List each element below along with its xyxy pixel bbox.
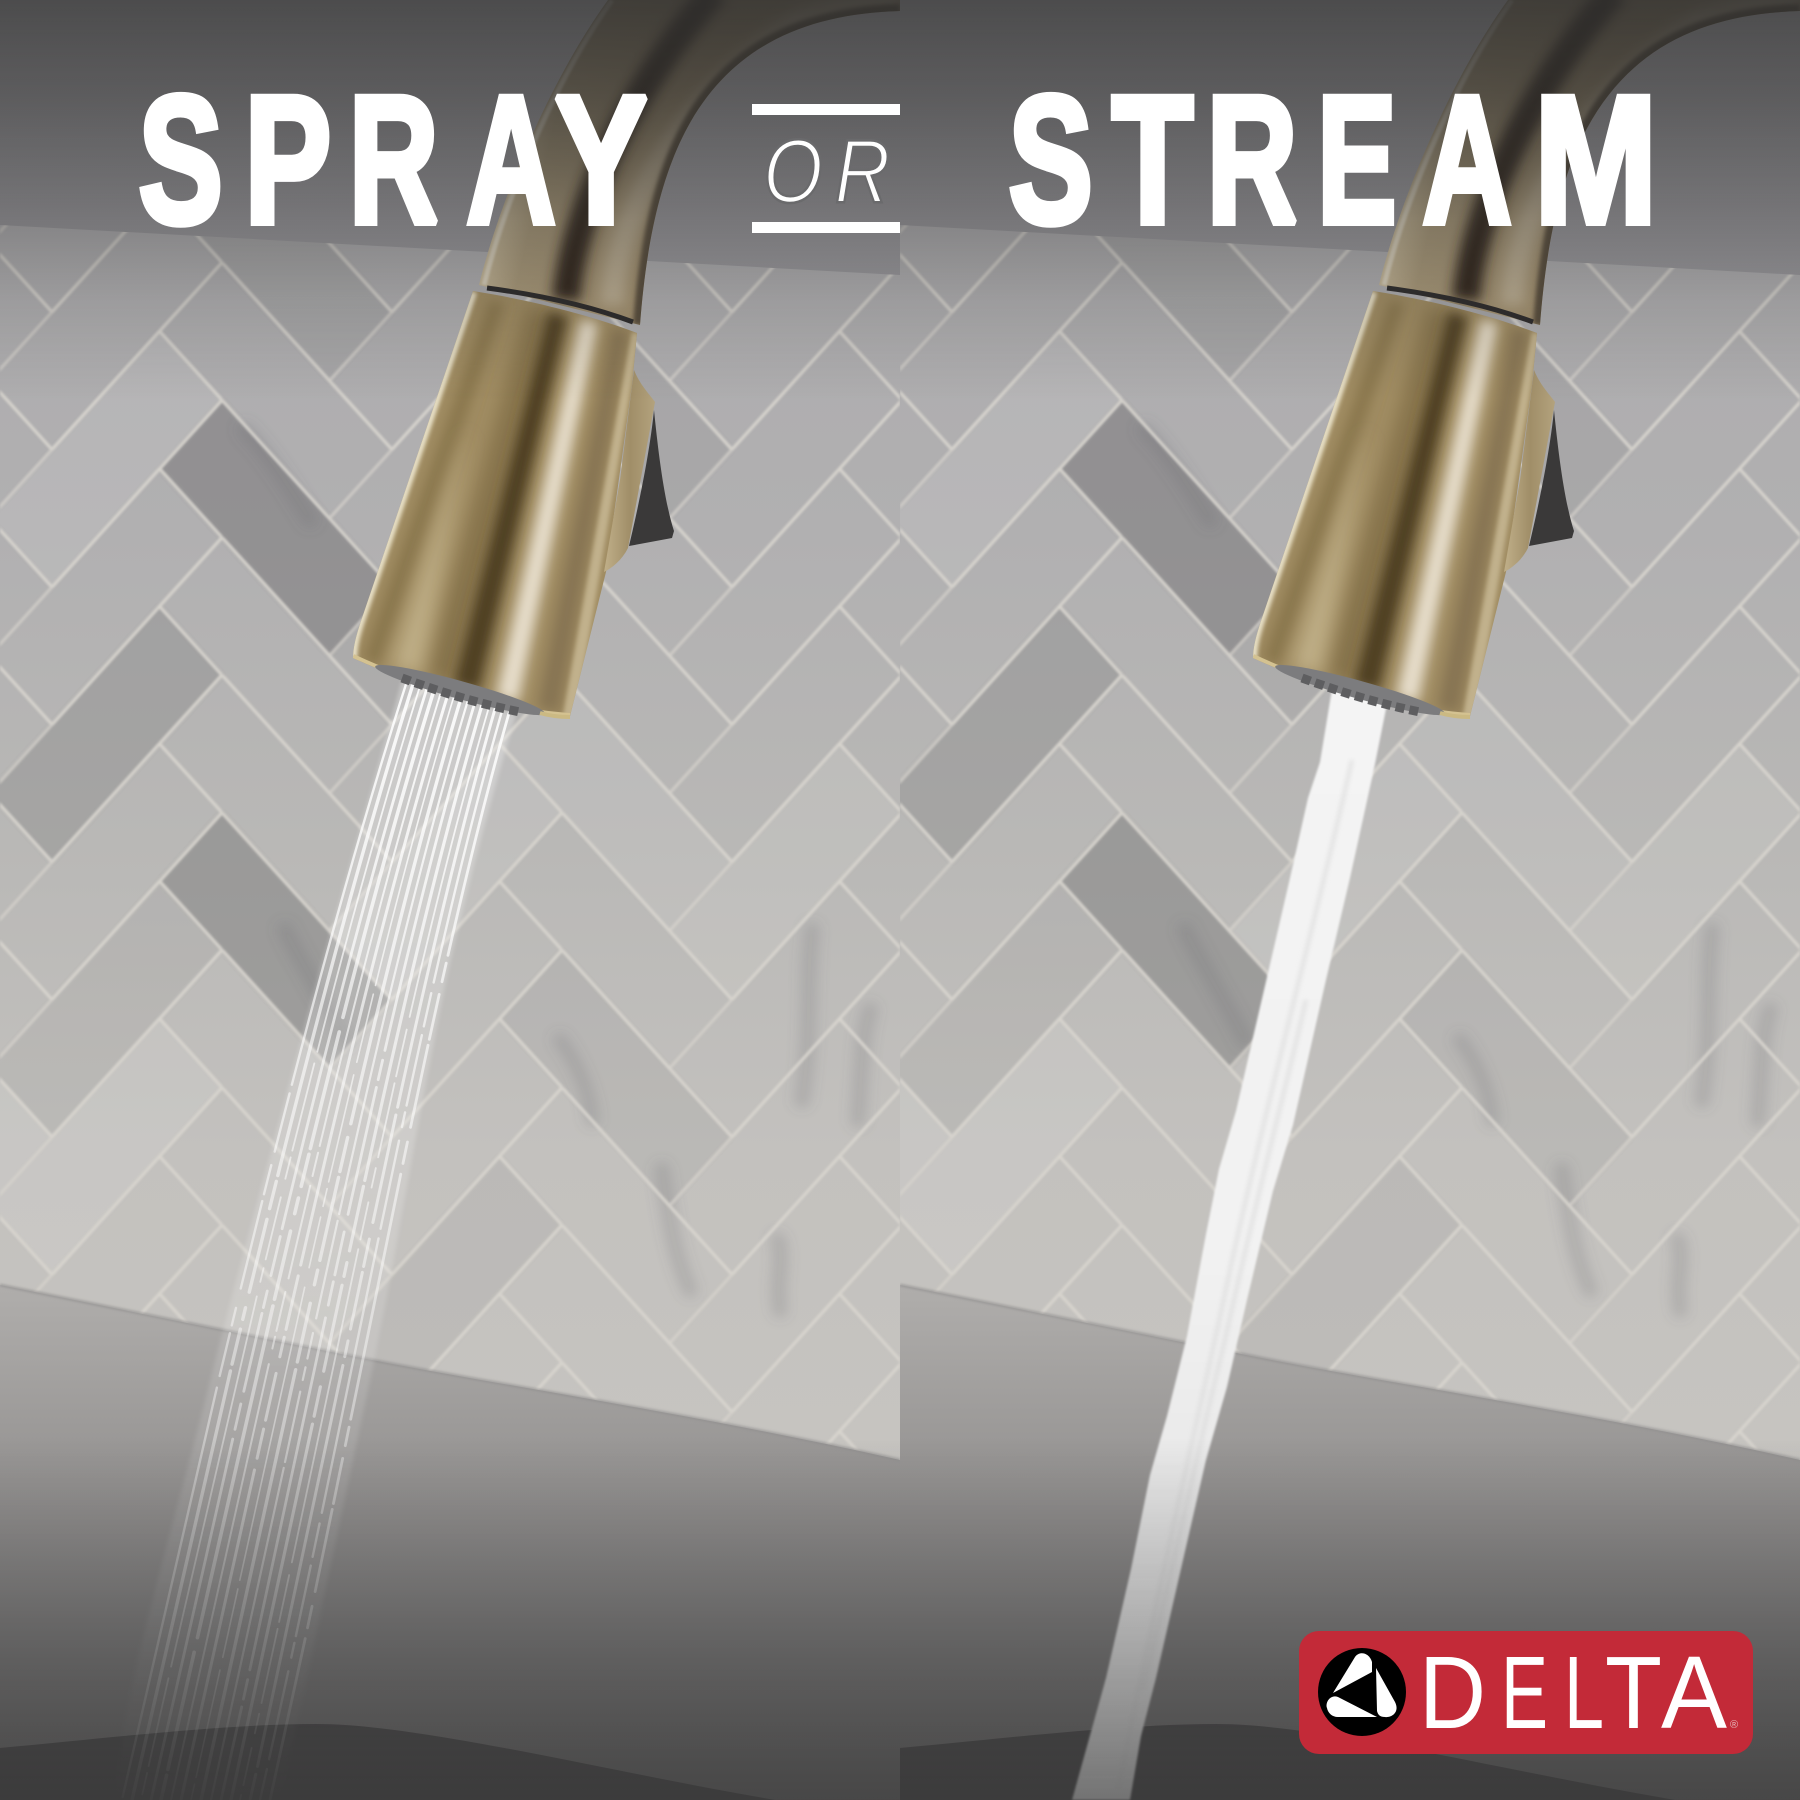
divider group: OR [752,104,900,233]
stream water [1072,689,1387,1800]
heading: STREAM: E [1317,58,1396,262]
faucet: stream [1253,0,1800,722]
heading: STREAM: T [1112,58,1193,262]
text: DELTA: A [1661,1635,1727,1750]
bottom dark gradient overlay [0,1440,1800,1800]
text: DELTA: L [1564,1635,1604,1750]
heading: SPRAY: S [138,58,223,262]
spray water [115,680,516,1800]
heading: SPRAY: A [466,58,556,262]
heading: SPRAY: P [244,58,331,262]
text: DELTA: E [1501,1635,1548,1750]
faucet: spray [353,0,910,722]
heading: STREAM: R [1207,58,1297,262]
background: marble herringbone wall and counter [900,0,1800,1800]
text: registered mark: ® [1730,1719,1738,1731]
icon: Delta triangle mark [1318,1648,1406,1736]
panel: stream [900,0,1800,1800]
text: DELTA: D [1419,1635,1486,1750]
background: marble herringbone wall and counter [0,0,902,1800]
top dark gradient overlay [0,0,1800,400]
text: OR: OR [763,120,890,221]
panel: spray [0,0,910,1800]
heading: SPRAY: Y [554,58,648,262]
heading: STREAM: M [1534,58,1657,262]
logo: Delta [1299,1631,1753,1754]
text: DELTA: T [1605,1635,1662,1750]
heading: SPRAY: R [349,58,438,262]
heading: STREAM: S [1008,58,1093,262]
heading: STREAM: A [1422,58,1512,262]
